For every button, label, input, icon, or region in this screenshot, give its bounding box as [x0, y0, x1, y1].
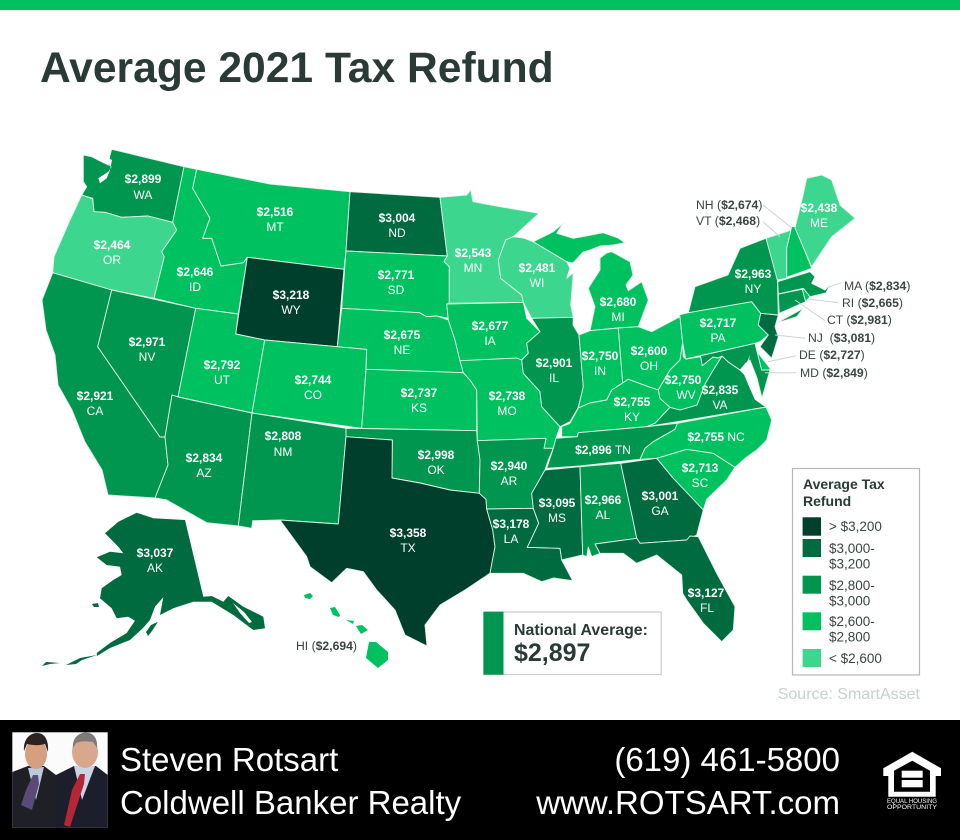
label: WA: WA — [134, 188, 152, 202]
swatch: over 3200: > $3,200 — [829, 519, 882, 534]
state: Maine — [795, 175, 855, 267]
label: National Average: — [514, 622, 648, 639]
label: NE: NE — [394, 343, 410, 357]
Molokai — [346, 620, 354, 624]
swatch: 2800-3000: $3,000 — [829, 594, 870, 608]
swatch: 2600-2800: $2,600- — [829, 614, 875, 629]
label: WI: $2,481 — [519, 261, 556, 275]
label: ME: $2,438 — [801, 201, 838, 215]
label: WI: WI — [530, 276, 544, 290]
swatch: under 2600: < $2,600 — [829, 651, 882, 666]
label: MO: $2,738 — [489, 389, 526, 403]
label: NM: $2,808 — [265, 429, 302, 443]
callout: NH — [696, 198, 792, 228]
label: PA: PA — [710, 331, 726, 345]
agent right — [56, 732, 108, 828]
callout: RI — [808, 296, 903, 310]
swatch: 3000-3200: $3,000- — [829, 541, 875, 556]
label: ID: $2,646 — [177, 265, 214, 279]
state: California — [42, 273, 168, 498]
state: Alabama — [580, 463, 637, 557]
Chesapeake Bay — [743, 355, 760, 400]
top accent bar — [0, 0, 960, 10]
label: WV: WV — [676, 388, 696, 402]
legend heading: Refund — [803, 493, 851, 509]
label: TX: TX — [400, 541, 416, 555]
callout: DE: DE ($2,727) — [799, 348, 865, 362]
Kauai — [304, 593, 313, 599]
label: IA: IA — [484, 334, 496, 348]
label: MS: MS — [548, 511, 566, 525]
state: West Virginia — [658, 343, 722, 410]
agent left — [12, 733, 58, 828]
label: NY: $2,963 — [735, 267, 772, 281]
footer band — [0, 720, 960, 840]
label: NV: NV — [139, 350, 155, 364]
label: OH: $2,600 — [631, 344, 668, 358]
state: Nebraska — [337, 308, 463, 373]
label: SC: $2,713 — [682, 461, 719, 475]
Big Island — [366, 642, 388, 668]
callout: NJ: NJ ($3,081) — [808, 331, 875, 345]
state: Indiana — [578, 328, 623, 408]
label: PA: $2,717 — [700, 316, 737, 330]
swatch: 3000-3200: $3,200 — [829, 556, 870, 572]
callout: NJ — [775, 331, 875, 345]
state: Arkansas — [477, 438, 553, 509]
label: KS: $2,737 — [401, 386, 438, 400]
icon: equal housing logo: EQUAL HOUSING — [887, 799, 937, 805]
label: GA: GA — [651, 504, 669, 518]
Oahu — [330, 607, 340, 617]
Alaska inlets — [233, 603, 252, 623]
label: IN: $2,750 — [582, 349, 619, 363]
water details — [98, 158, 760, 623]
state: Pennsylvania — [679, 302, 768, 359]
state: Kansas — [362, 369, 477, 431]
label: LA: $3,178 — [493, 517, 530, 531]
label: ME: ME — [810, 216, 828, 230]
state: Colorado — [252, 340, 367, 428]
callout: NH: NH ($2,674) — [696, 198, 762, 212]
Nunivak island — [92, 603, 99, 607]
state: Vermont — [766, 230, 792, 280]
label: OR: OR — [103, 253, 121, 267]
state: Texas — [280, 437, 495, 646]
label: UT: $2,792 — [204, 358, 241, 372]
state: Rhode Island — [802, 288, 810, 302]
state: Michigan — [533, 223, 648, 331]
state: New Hampshire — [787, 227, 812, 277]
upper peninsula — [533, 223, 625, 263]
label: CO: CO — [304, 388, 322, 402]
label: MN: MN — [464, 261, 482, 275]
label: SD: $2,771 — [378, 268, 415, 282]
national average box — [484, 612, 661, 675]
label: UT: UT — [214, 373, 231, 387]
map of the United States — [42, 149, 855, 668]
title: Average 2021 Tax Refund — [40, 44, 554, 92]
state: Connecticut — [778, 289, 806, 313]
state: South Dakota — [342, 251, 449, 318]
label: WA: $2,899 — [125, 172, 162, 186]
state: Nevada — [98, 290, 196, 437]
swatch: over 3200 — [803, 517, 882, 536]
source: Source: SmartAsset — [778, 686, 921, 703]
label: AZ: AZ — [196, 466, 212, 480]
label: NM: NM — [274, 445, 292, 459]
swatch: 2800-3000 — [803, 576, 875, 608]
callout: CT: CT ($2,981) — [827, 313, 892, 327]
state: Florida — [595, 536, 735, 642]
Kodiak island — [146, 622, 158, 636]
accent bar — [484, 612, 504, 675]
state: Maryland — [686, 343, 770, 398]
label: FL: FL — [700, 601, 714, 615]
state: Montana — [193, 169, 350, 269]
state: Iowa — [447, 302, 540, 361]
swatch: 3000-3200 — [803, 539, 875, 572]
label: AK: AK — [147, 561, 163, 575]
state: New Jersey — [758, 313, 778, 358]
callout: MA: MA ($2,834) — [844, 279, 910, 293]
lower peninsula — [588, 252, 648, 331]
state: Kentucky — [562, 379, 670, 437]
label: WY: WY — [281, 303, 301, 317]
label: ND: $3,004 — [379, 211, 416, 225]
swatch: 2600-2800 — [803, 612, 875, 644]
mainland — [97, 513, 265, 656]
label: VA: $2,835 — [702, 383, 739, 397]
icon: equal housing logo: OPPORTUNITY — [887, 805, 937, 811]
state: Georgia — [621, 458, 707, 543]
state: Washington — [82, 149, 184, 222]
value: $2,897 — [514, 639, 590, 667]
label: SD: SD — [388, 283, 405, 297]
state: Minnesota — [440, 190, 539, 303]
label: AL: AL — [596, 508, 611, 522]
label: WV: $2,750 — [665, 373, 702, 387]
label: OK: $2,998 — [418, 448, 455, 462]
state: Louisiana — [487, 508, 573, 582]
label: AK: $3,037 — [137, 546, 174, 560]
agent photo — [12, 732, 108, 828]
label: KY: KY — [624, 410, 640, 424]
label: NY: NY — [745, 282, 761, 296]
state: Missouri — [460, 358, 560, 448]
Long Island — [777, 308, 803, 323]
state: Illinois — [522, 317, 583, 427]
callout: VT — [696, 214, 780, 237]
label: AZ: $2,834 — [186, 451, 223, 465]
state: Delaware — [755, 343, 770, 370]
label: OR: $2,464 — [94, 238, 131, 252]
label: TN: $2,896 TN — [575, 443, 631, 457]
callout: DE — [768, 348, 865, 362]
state: Oregon — [53, 195, 177, 298]
state: Virginia — [647, 356, 766, 427]
label: TX: $3,358 — [390, 526, 427, 540]
state: Wisconsin — [498, 237, 573, 318]
label: OK: OK — [427, 463, 445, 477]
label: IL: $2,901 — [536, 356, 573, 370]
state: Ohio — [618, 317, 683, 390]
label: NV: $2,971 — [129, 335, 166, 349]
mainland — [688, 238, 778, 315]
legend — [792, 468, 920, 675]
callout: CT — [795, 300, 892, 327]
label: ID: ID — [189, 280, 201, 294]
label: OH: OH — [640, 359, 658, 373]
callout: RI: RI ($2,665) — [842, 296, 903, 310]
label: GA: $3,001 — [642, 489, 679, 503]
state: Alaska — [42, 513, 265, 666]
swatch: 2600-2800: $2,800 — [829, 630, 870, 644]
label: AR: $2,940 — [491, 459, 528, 473]
label: NC: $2,755 NC — [687, 430, 745, 444]
state: Wyoming — [236, 257, 344, 347]
state: Massachusetts — [778, 272, 830, 297]
label: FL: $3,127 — [688, 586, 725, 600]
phone: (619) 461-5800 — [614, 741, 840, 778]
state: Utah — [178, 308, 265, 413]
legend heading: Average Tax — [803, 476, 885, 492]
label: LA: LA — [504, 532, 518, 546]
state: New Mexico — [238, 413, 346, 528]
label: MS: $3,095 — [539, 496, 576, 510]
label: KS: KS — [411, 401, 427, 415]
state: North Carolina — [640, 407, 772, 467]
label: IN: IN — [594, 364, 606, 378]
swatch: under 2600 — [803, 649, 882, 667]
label: IL: IL — [549, 371, 559, 385]
label: MN: $2,543 — [455, 246, 492, 260]
state value labels — [77, 172, 838, 615]
state: Arizona — [155, 395, 252, 526]
label: MI: MI — [611, 310, 625, 324]
label: MT: $2,516 — [257, 205, 294, 219]
callout: MD: MD ($2,849) — [800, 366, 868, 380]
state: Tennessee — [547, 423, 677, 468]
state: Idaho — [154, 167, 247, 314]
label: AL: $2,966 — [585, 493, 622, 507]
state: North Dakota — [346, 192, 447, 256]
callout: VT: VT ($2,468) — [696, 214, 760, 228]
swatch: 2800-3000: $2,800- — [829, 578, 875, 593]
brokerage: Coldwell Banker Realty — [120, 784, 462, 821]
label: CO: $2,744 — [295, 373, 332, 387]
Maui — [356, 625, 368, 634]
label: MT: MT — [266, 220, 284, 234]
state: Hawaii — [304, 593, 388, 668]
Aleutian islands — [66, 655, 97, 665]
label: CA: $2,921 — [77, 389, 114, 403]
state: South Carolina — [657, 449, 735, 510]
small-state callouts with leader lines — [296, 198, 910, 653]
state: Mississippi — [527, 467, 583, 560]
website: www.ROTSART.com — [535, 784, 840, 821]
label: MI: $2,680 — [600, 295, 637, 309]
label: VA: VA — [712, 398, 728, 412]
label: CA: CA — [87, 404, 103, 418]
icon: equal housing logo — [883, 752, 941, 811]
state: New York — [688, 238, 803, 323]
callout: HI: HI ($2,694) — [296, 639, 357, 653]
agent name: Steven Rotsart — [120, 741, 338, 778]
label: MO: MO — [497, 404, 517, 418]
callout: MD — [765, 366, 868, 380]
label: ND: ND — [388, 226, 406, 240]
state: Oklahoma — [346, 428, 480, 493]
Puget Sound — [98, 158, 112, 183]
label: NE: $2,675 — [384, 328, 421, 342]
label: SC: SC — [692, 476, 709, 490]
label: IA: $2,677 — [472, 319, 509, 333]
label: WY: $3,218 — [273, 288, 310, 302]
label: AR: AR — [501, 474, 518, 488]
label: KY: $2,755 — [614, 395, 651, 409]
